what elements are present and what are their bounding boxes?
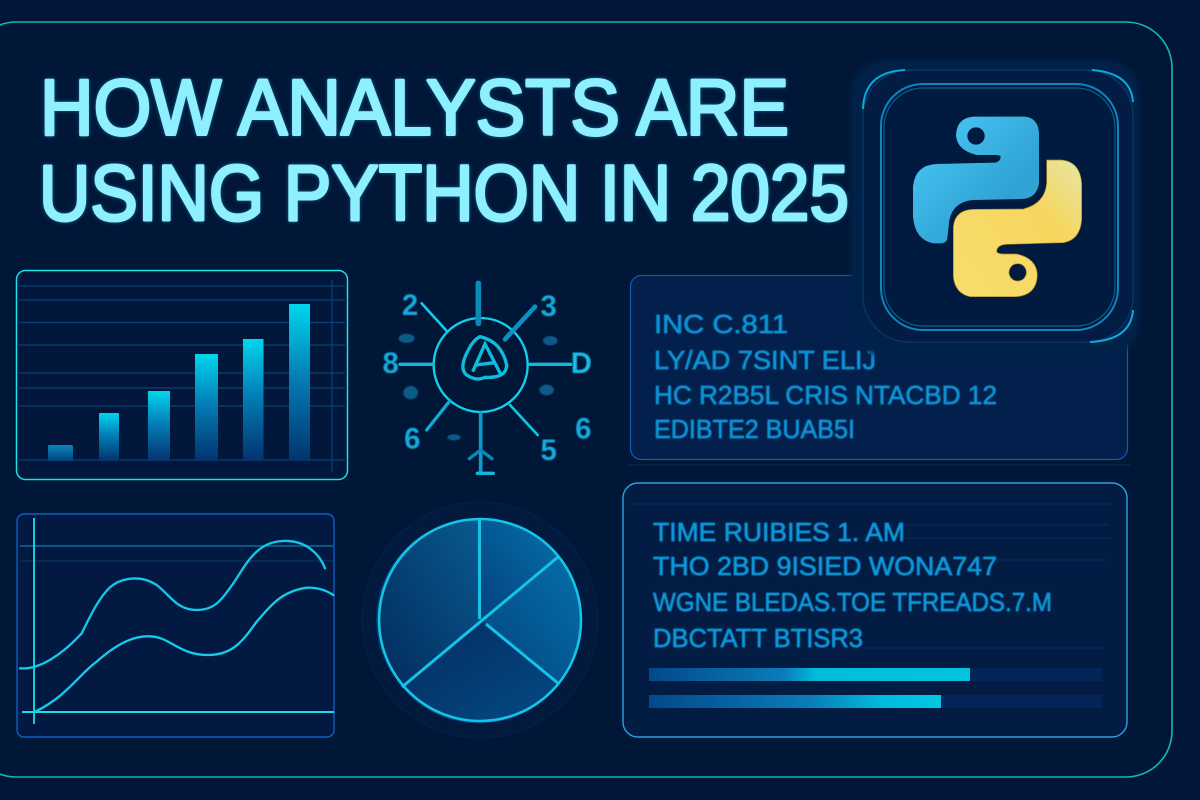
radial numbers: 2 (402, 289, 418, 322)
radial numbers: 5 (541, 434, 557, 467)
progress bar 1 (649, 668, 1102, 681)
summary text: TIME RUIBIES 1. AM (653, 517, 905, 547)
notes text (654, 309, 997, 444)
pie slices (376, 519, 581, 723)
panel: line chart (17, 514, 334, 737)
title: HOW ANALYSTS ARE (40, 62, 789, 152)
summary text (653, 517, 1052, 653)
notes text: HC R2B5L CRIS NTACBD 12 (654, 380, 997, 410)
radial numbers: 6 (404, 422, 420, 455)
axes (22, 518, 334, 724)
summary text: THO 2BD 9ISIED WONA747 (653, 551, 997, 581)
title (39, 62, 849, 237)
summary text: DBCTATT BTISR3 (653, 623, 863, 653)
bars (48, 304, 310, 461)
radial numbers: 6 (575, 412, 591, 445)
panel: bar chart (16, 270, 348, 480)
faint marks (399, 334, 558, 440)
hub ring (434, 318, 528, 412)
panel: summary with progress bars (623, 483, 1127, 737)
spokes (400, 283, 571, 473)
radial numbers (383, 289, 592, 467)
radial numbers: D (571, 347, 592, 380)
radial numbers: 3 (541, 290, 557, 323)
notes text: EDIBTE2 BUAB5I (654, 414, 855, 444)
python snake shapes (913, 117, 1082, 297)
notes text: INC C.811 (654, 309, 788, 339)
summary text: WGNE BLEDAS.TOE TFREADS.7.M (653, 587, 1052, 617)
title: USING PYTHON IN 2025 (39, 148, 849, 237)
pie chart (362, 502, 598, 738)
hub letter (463, 337, 507, 379)
progress bar 2 (649, 695, 1102, 708)
radial numbers: 8 (383, 347, 399, 380)
curves (20, 541, 333, 712)
radial diagram (383, 283, 592, 473)
panel: code notes (628, 276, 1130, 465)
icon: python logo badge (851, 60, 1139, 356)
notes text: LY/AD 7SINT ELIJ (654, 345, 876, 375)
